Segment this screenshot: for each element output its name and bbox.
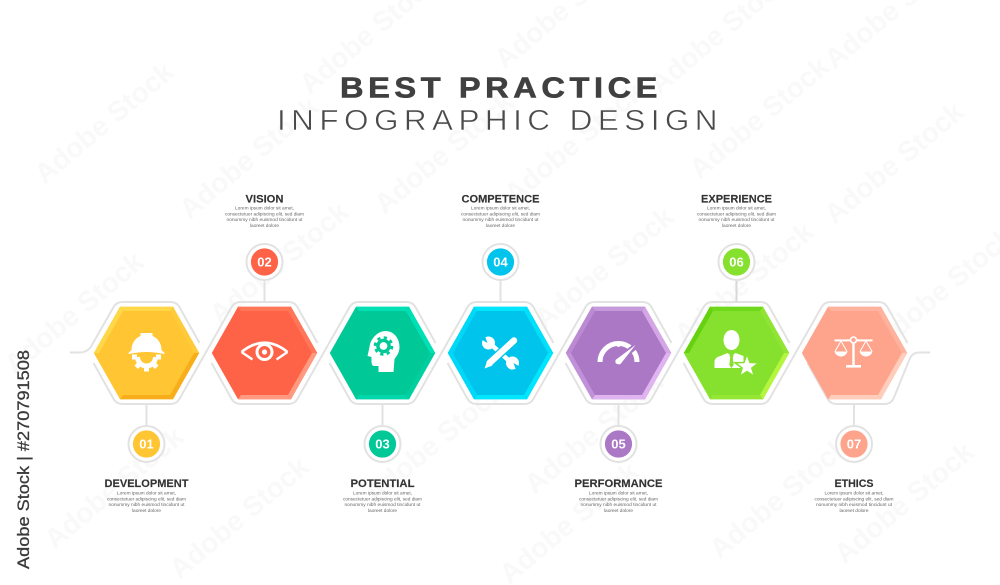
heading: development: DEVELOPMENT	[104, 478, 189, 490]
body text 07: laoreet dolore	[840, 508, 869, 514]
body text 02: nonummy nibh euismod tincidunt ut	[226, 217, 303, 223]
body text 01: nonummy nibh euismod tincidunt ut	[108, 502, 185, 508]
panel: step 03 potential	[330, 307, 435, 514]
hexagon 03	[330, 307, 435, 399]
background watermark: Adobe Stock	[0, 246, 150, 380]
badge 07: 07	[847, 437, 861, 452]
badge 05	[600, 426, 636, 462]
icon: head with gear	[368, 331, 400, 372]
body text 06: Lorem ipsum dolor sit amet,	[707, 206, 766, 212]
body text 01: Lorem ipsum dolor sit amet,	[117, 490, 176, 496]
body text 05	[579, 490, 658, 514]
icon: eye	[242, 343, 288, 360]
body text 04: nonummy nibh euismod tincidunt ut	[462, 217, 539, 223]
heading: performance: PERFORMANCE	[574, 478, 662, 490]
hexagon 01	[94, 307, 199, 399]
badge 03: 03	[375, 437, 390, 452]
background watermark: Adobe Stock	[368, 86, 520, 220]
body text 01: laoreet dolore	[132, 508, 161, 514]
background watermark: Adobe Stock	[163, 451, 315, 585]
icon: speedometer gauge	[600, 344, 637, 364]
body text 06	[697, 206, 776, 229]
panel: step 05 performance	[566, 307, 671, 514]
body text 01	[107, 490, 186, 514]
connector 06	[736, 280, 738, 302]
background watermark: Adobe Stock	[38, 421, 190, 555]
heading: competence: COMPETENCE	[462, 194, 540, 206]
body text 07: consectetuer adipiscing elit, sed diam	[814, 496, 894, 502]
background watermark: Adobe Stock	[358, 376, 510, 510]
connector 07	[853, 404, 855, 426]
background watermark: Adobe Stock	[203, 196, 355, 330]
title	[277, 72, 723, 137]
panel: step 04 competence	[448, 194, 553, 399]
body text 03	[343, 490, 422, 514]
badge 04	[482, 244, 518, 280]
background watermark: Adobe Stock	[818, 96, 970, 230]
heading: ethics: ETHICS	[834, 478, 874, 490]
icon: hard hat with gear	[128, 333, 164, 372]
badge 04: 04	[493, 255, 508, 270]
background watermark: Adobe Stock	[703, 431, 855, 565]
hexagon 07	[802, 307, 907, 399]
badge 01: 01	[139, 437, 154, 452]
body text 02	[225, 206, 304, 229]
background watermark: Adobe Stock	[668, 216, 820, 350]
body text 04: laoreet dolore	[486, 223, 515, 229]
background watermark: Adobe Stock	[518, 366, 670, 500]
hexagon 04	[448, 307, 553, 399]
body text 06: laoreet dolore	[722, 223, 751, 229]
badge 03	[364, 426, 400, 462]
background watermark: Adobe Stock	[173, 91, 325, 225]
body text 02: Lorem ipsum dolor sit amet,	[235, 206, 294, 212]
badge 02	[246, 244, 282, 280]
body text 03: Lorem ipsum dolor sit amet,	[353, 490, 412, 496]
icon: wrench and pencil	[480, 335, 520, 371]
body text 07: Lorem ipsum dolor sit amet,	[824, 490, 884, 496]
body text 05: nonummy nibh euismod tincidunt ut	[580, 502, 657, 508]
panel: step 06 experience	[684, 194, 789, 399]
title: BEST PRACTICE	[340, 72, 662, 104]
icon: person with star	[714, 330, 759, 377]
badge 01	[128, 426, 164, 462]
heading: potential: POTENTIAL	[350, 478, 415, 490]
body text 07	[814, 490, 894, 514]
body text 04: consectetuer adipiscing elit, sed diam	[461, 211, 540, 217]
background watermark: Adobe Stock	[683, 51, 835, 185]
body text 07: nonummy nibh euismod tincidunt ut	[816, 502, 893, 508]
badge 05: 05	[611, 437, 626, 452]
connector 04	[500, 280, 502, 302]
background watermark: Adobe Stock	[528, 201, 680, 335]
body text 04: Lorem ipsum dolor sit amet,	[471, 206, 530, 212]
body text 03: consectetuer adipiscing elit, sed diam	[343, 496, 422, 502]
connector 01	[146, 404, 148, 426]
body text 05: consectetuer adipiscing elit, sed diam	[579, 496, 658, 502]
badge 02: 02	[257, 255, 272, 270]
hexagon 06	[684, 307, 789, 399]
body text 06: consectetuer adipiscing elit, sed diam	[697, 211, 776, 217]
connector 05	[618, 404, 620, 426]
connector 02	[264, 280, 266, 302]
hexagon 02	[212, 307, 317, 399]
panel: step 02 vision	[212, 194, 317, 399]
heading: vision: VISION	[246, 194, 284, 206]
title: INFOGRAPHIC DESIGN	[277, 105, 723, 137]
panel: step 07 ethics	[802, 307, 907, 514]
badge 06	[718, 244, 754, 280]
hexagon 05	[566, 307, 671, 399]
badge 06: 06	[729, 255, 744, 270]
badge 07	[836, 426, 872, 462]
connector 03	[382, 404, 384, 426]
stock id vertical label: Adobe Stock | #270791508	[15, 350, 33, 569]
background watermark: Adobe Stock	[498, 76, 650, 210]
body text 01: consectetuer adipiscing elit, sed diam	[107, 496, 186, 502]
icon: balance scales	[834, 337, 872, 368]
background watermark: Adobe Stock	[28, 56, 180, 190]
body text 02: laoreet dolore	[250, 223, 279, 229]
body text 02: consectetuer adipiscing elit, sed diam	[225, 211, 304, 217]
body text 03: laoreet dolore	[368, 508, 397, 514]
panel: step 01 development	[94, 307, 199, 514]
heading: experience: EXPERIENCE	[701, 194, 772, 206]
body text 05: laoreet dolore	[604, 508, 633, 514]
background watermark: Adobe Stock	[828, 436, 980, 570]
body text 06: nonummy nibh euismod tincidunt ut	[698, 217, 775, 223]
hexagon chain outline	[70, 302, 930, 404]
body text 05: Lorem ipsum dolor sit amet,	[589, 490, 648, 496]
body text 03: nonummy nibh euismod tincidunt ut	[344, 502, 421, 508]
body text 04	[461, 206, 540, 229]
